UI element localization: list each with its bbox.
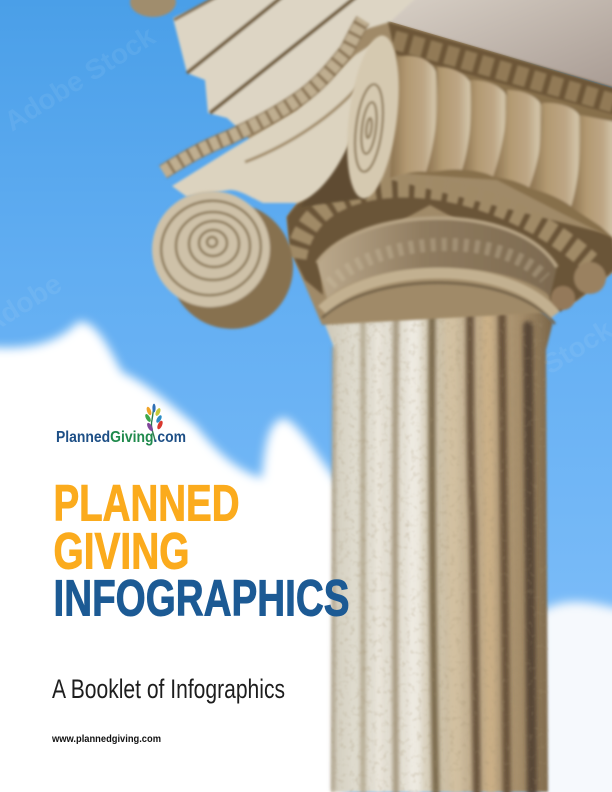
column shaft (325, 288, 553, 792)
stone speckle (331, 320, 549, 792)
icon: sprouting plant (144, 404, 164, 441)
egg and dart band under soffit (388, 22, 612, 120)
flutes (333, 306, 532, 792)
upper moulding (163, 20, 363, 172)
title: PLANNED (54, 474, 240, 532)
title: INFOGRAPHICS (54, 570, 350, 626)
carved collar (317, 216, 557, 324)
entablature blocks (130, 0, 418, 130)
subtitle: A Booklet of Infographics (52, 674, 285, 704)
website url: www.plannedgiving.com (51, 733, 161, 745)
bolster rolls (380, 50, 612, 240)
spiral volute (139, 178, 311, 346)
title (54, 474, 350, 626)
title: GIVING (54, 522, 190, 580)
side volute face (339, 33, 407, 201)
stock watermark: Adobe Stock (0, 20, 161, 137)
column capital (130, 0, 612, 346)
volute channel (172, 37, 383, 203)
clouds (0, 322, 612, 792)
capital backing stone (240, 20, 612, 325)
stock watermark (0, 20, 612, 380)
soffit (388, 0, 612, 88)
logo wordmark: PlannedGiving.com (56, 429, 186, 446)
logo: PlannedGiving.com (56, 404, 186, 446)
shadow wedge (300, 145, 368, 207)
egg band (287, 172, 612, 312)
